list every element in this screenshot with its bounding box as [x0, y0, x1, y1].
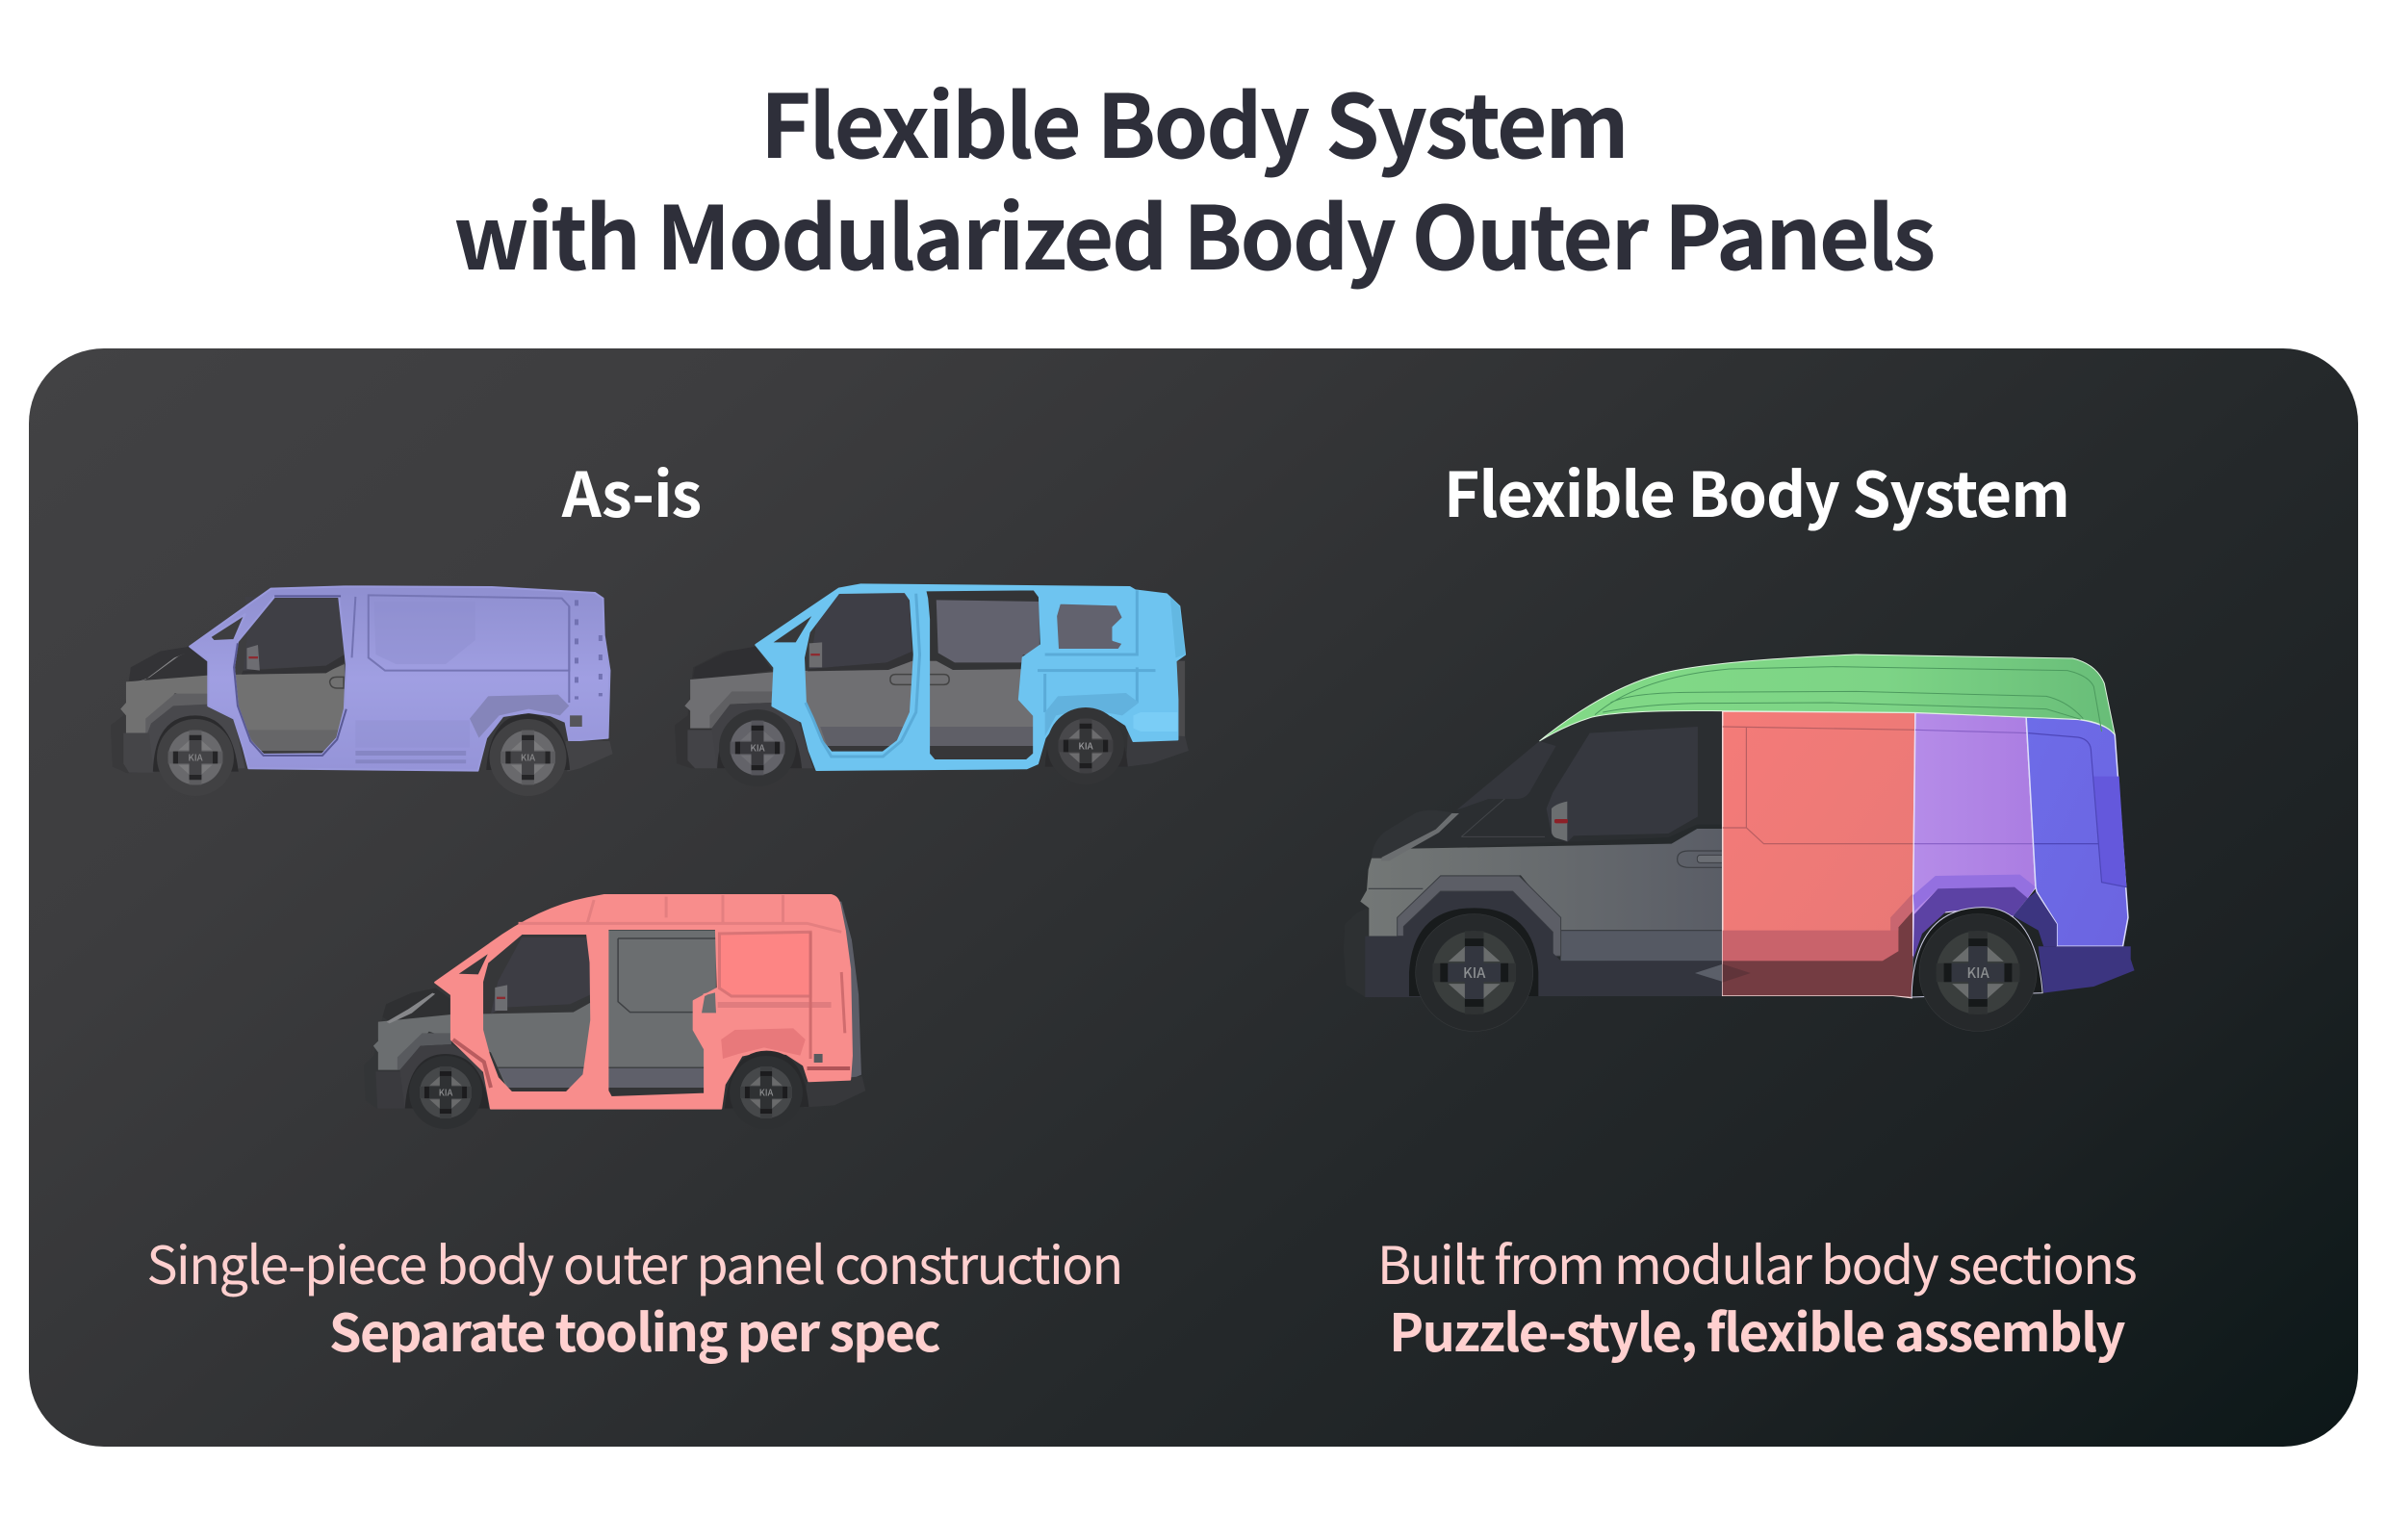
- wheel: KIA: [521, 751, 535, 764]
- heading: as-is: As-is: [561, 447, 701, 535]
- wheel: [719, 709, 796, 786]
- caption: flexible body system: [1377, 1223, 2136, 1367]
- title: with Modularized Body Outer Panels: [453, 168, 1934, 295]
- blue panel section: [2013, 717, 2135, 993]
- wheel: [1416, 914, 1533, 1032]
- wheel: [730, 1056, 803, 1129]
- van: flexible body system: [1344, 654, 2135, 1032]
- wheel: [1919, 914, 2037, 1032]
- title: Flexible Body System: [760, 57, 1627, 184]
- wheel: [489, 719, 566, 796]
- wheel: [409, 1056, 482, 1129]
- wheel: KIA: [750, 741, 765, 755]
- panel: dark background: [29, 348, 2358, 1447]
- wheel: KIA: [759, 1085, 774, 1098]
- wheel: KIA: [439, 1085, 453, 1098]
- wheel: KIA: [1966, 962, 1990, 983]
- van: single-piece lavender panel: [111, 586, 612, 796]
- heading: flexible body system: Flexible Body System: [1444, 447, 2069, 535]
- red panel section: [1723, 711, 1915, 998]
- caption: as-is: Single-piece body outer panel construction: [146, 1223, 1122, 1299]
- wheel: [1047, 707, 1124, 784]
- caption: as-is: [146, 1223, 1122, 1367]
- caption: flexible body system: Built from modular body sections: [1377, 1223, 2136, 1299]
- van: single-piece salmon panel: [364, 895, 865, 1129]
- green roof section: [1539, 654, 2115, 741]
- wheel: KIA: [1078, 739, 1093, 753]
- caption: flexible body system: Puzzle-style, flexible assembly: [1389, 1291, 2125, 1367]
- title: [453, 57, 1934, 295]
- van cabin and front: [1344, 710, 1723, 997]
- body panel sections: [1539, 654, 2135, 998]
- caption: as-is: Separate tooling per spec: [329, 1291, 939, 1367]
- wheel: KIA: [1463, 962, 1486, 983]
- rear wheel well: [1912, 908, 2042, 997]
- purple panel section: [1913, 712, 2036, 960]
- van: single-piece blue panel: [675, 584, 1189, 786]
- wheel: [157, 719, 234, 796]
- wheel: KIA: [188, 751, 203, 764]
